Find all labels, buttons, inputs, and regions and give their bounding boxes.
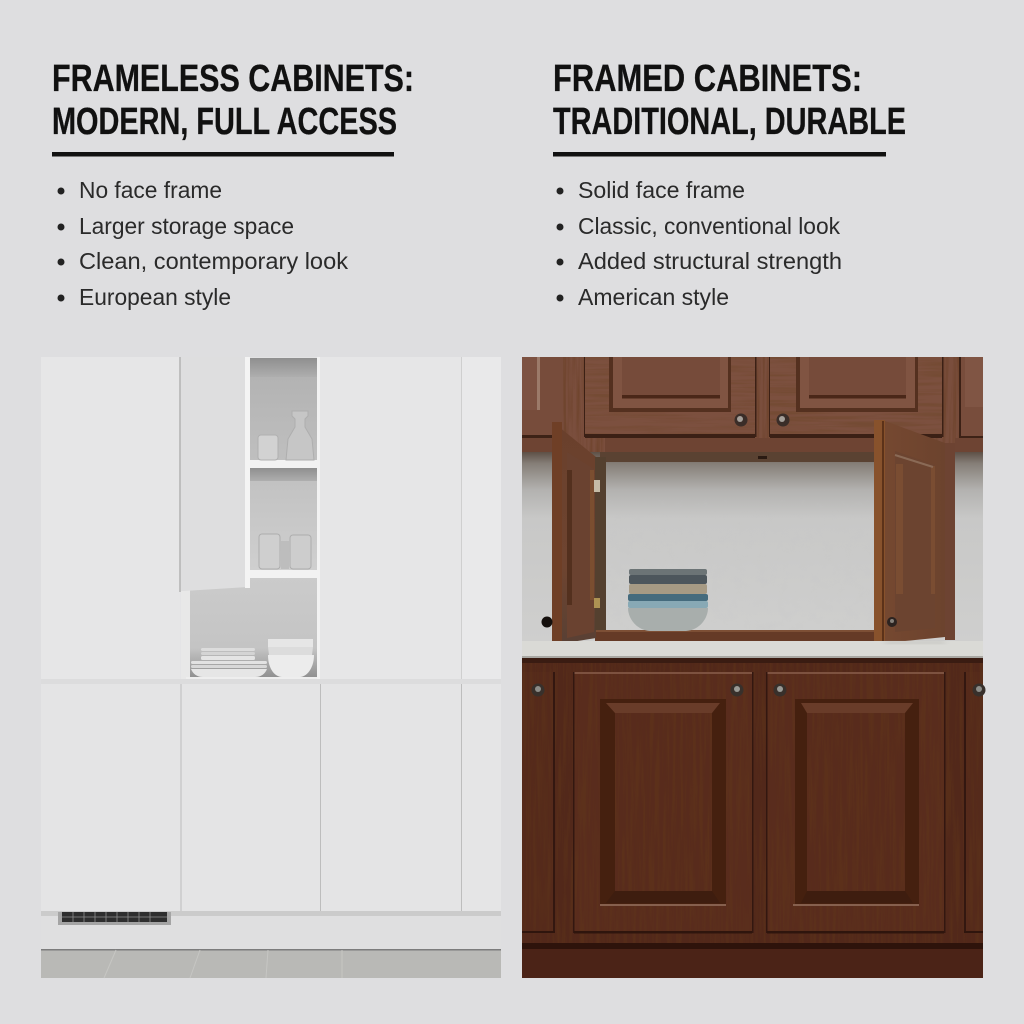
open upper shelves [250, 358, 317, 578]
upper right doors [317, 357, 501, 681]
bullet list: frameless features: No face frame [79, 177, 222, 203]
heading: framed cabinets [553, 58, 906, 156]
base cabinet face frame [522, 658, 983, 943]
base knobs [532, 684, 986, 696]
bullet list: frameless features: Larger storage space [79, 213, 294, 239]
heading: frameless cabinets: FRAMELESS CABINETS: [52, 58, 414, 100]
lower cabinet interior [181, 578, 320, 683]
toe kick [522, 943, 983, 978]
panel: white frameless cabinets photo [41, 357, 501, 978]
upper door: left partial [522, 357, 563, 438]
shelf board [595, 630, 880, 641]
stacked plates [191, 648, 267, 677]
floor [41, 949, 501, 978]
panel: wood framed cabinets photo [522, 357, 986, 978]
glassware [258, 411, 314, 569]
base door 2 [766, 672, 946, 934]
bullet list: frameless features: Clean, contemporary look [79, 248, 349, 274]
upper knobs [734, 414, 790, 426]
stacked bowls [268, 639, 314, 677]
countertop [522, 641, 983, 658]
lower doors [41, 684, 501, 911]
heading: framed cabinets: TRADITIONAL, DURABLE [553, 101, 906, 143]
bullet list: framed features: Classic, conventional look [578, 213, 840, 239]
base door: left partial [522, 672, 555, 933]
base door 1 [573, 672, 754, 934]
side wall shelf ends [522, 438, 552, 452]
bullet list: framed features: American style [578, 284, 729, 310]
open door left [542, 422, 606, 645]
upper door 1 [584, 357, 756, 438]
upper left door [41, 357, 180, 679]
upper door 2 [769, 357, 944, 438]
backsplash wall [522, 452, 983, 642]
open door right [874, 420, 955, 643]
bullet list: framed features [556, 177, 842, 310]
heading: framed cabinets: FRAMED CABINETS: [553, 58, 862, 100]
bullet list: frameless features: European style [79, 284, 231, 310]
stacked bowls [628, 569, 708, 631]
bullet list: framed features: Added structural strength [578, 248, 842, 274]
bullet list: frameless features [58, 177, 349, 310]
plinth [41, 911, 501, 950]
bullet list: framed features: Solid face frame [578, 177, 745, 203]
upper cabinet face frame [522, 357, 983, 462]
vent grille [58, 912, 171, 925]
upper door: right partial [959, 357, 983, 439]
heading: frameless cabinets: MODERN, FULL ACCESS [52, 101, 397, 143]
base door: right partial [964, 672, 983, 933]
open door leaf [179, 357, 250, 592]
heading: frameless cabinets [52, 58, 414, 156]
